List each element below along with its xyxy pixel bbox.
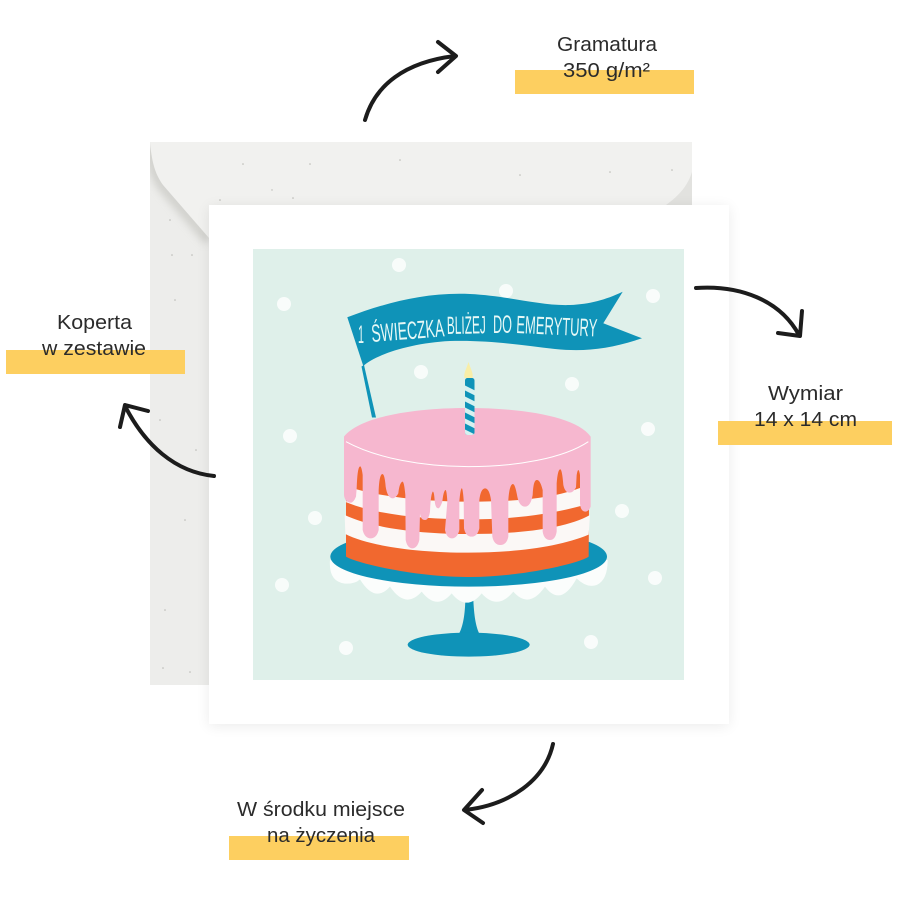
arrow: to W srodku xyxy=(464,744,553,823)
stand scallops xyxy=(330,560,608,603)
callout: Gramatura: 350 g/m² xyxy=(563,60,650,82)
callout: Wymiar xyxy=(718,383,892,445)
stand base xyxy=(458,600,480,635)
banner text xyxy=(358,310,598,349)
arrow: to Gramatura xyxy=(365,42,456,120)
callout: Wymiar: 14 x 14 cm xyxy=(754,409,857,431)
snow dots xyxy=(275,258,662,655)
callout: Koperta: Koperta xyxy=(57,312,133,334)
banner text: 1 xyxy=(358,321,364,349)
callout: W srodku: na życzenia xyxy=(267,825,376,847)
callout: Gramatura: Gramatura xyxy=(557,34,658,56)
arrow: to Wymiar xyxy=(696,288,802,336)
card xyxy=(209,205,729,726)
card illustration xyxy=(253,249,684,680)
banner flag xyxy=(347,292,642,418)
candle xyxy=(464,362,474,435)
stand plate xyxy=(330,527,607,587)
banner text: BLIŻEJ xyxy=(447,310,486,340)
callout: W srodku: W środku miejsce xyxy=(237,799,405,821)
banner text: DO xyxy=(493,311,512,339)
icing xyxy=(344,408,591,548)
candle flame xyxy=(464,362,473,378)
banner text: ŚWIECZKA xyxy=(370,312,445,348)
callout: Koperta xyxy=(6,312,185,374)
callout: Koperta: w zestawie xyxy=(41,338,146,360)
callout: Wymiar: Wymiar xyxy=(768,383,843,405)
callout: W srodku xyxy=(229,799,409,860)
callout: Gramatura xyxy=(515,34,694,94)
cake xyxy=(330,408,608,657)
banner text: EMERYTURY xyxy=(516,311,598,343)
arrow: to Koperta xyxy=(120,405,214,476)
envelope xyxy=(150,142,692,685)
icing rim highlight xyxy=(346,442,588,467)
cake layers xyxy=(346,463,589,577)
